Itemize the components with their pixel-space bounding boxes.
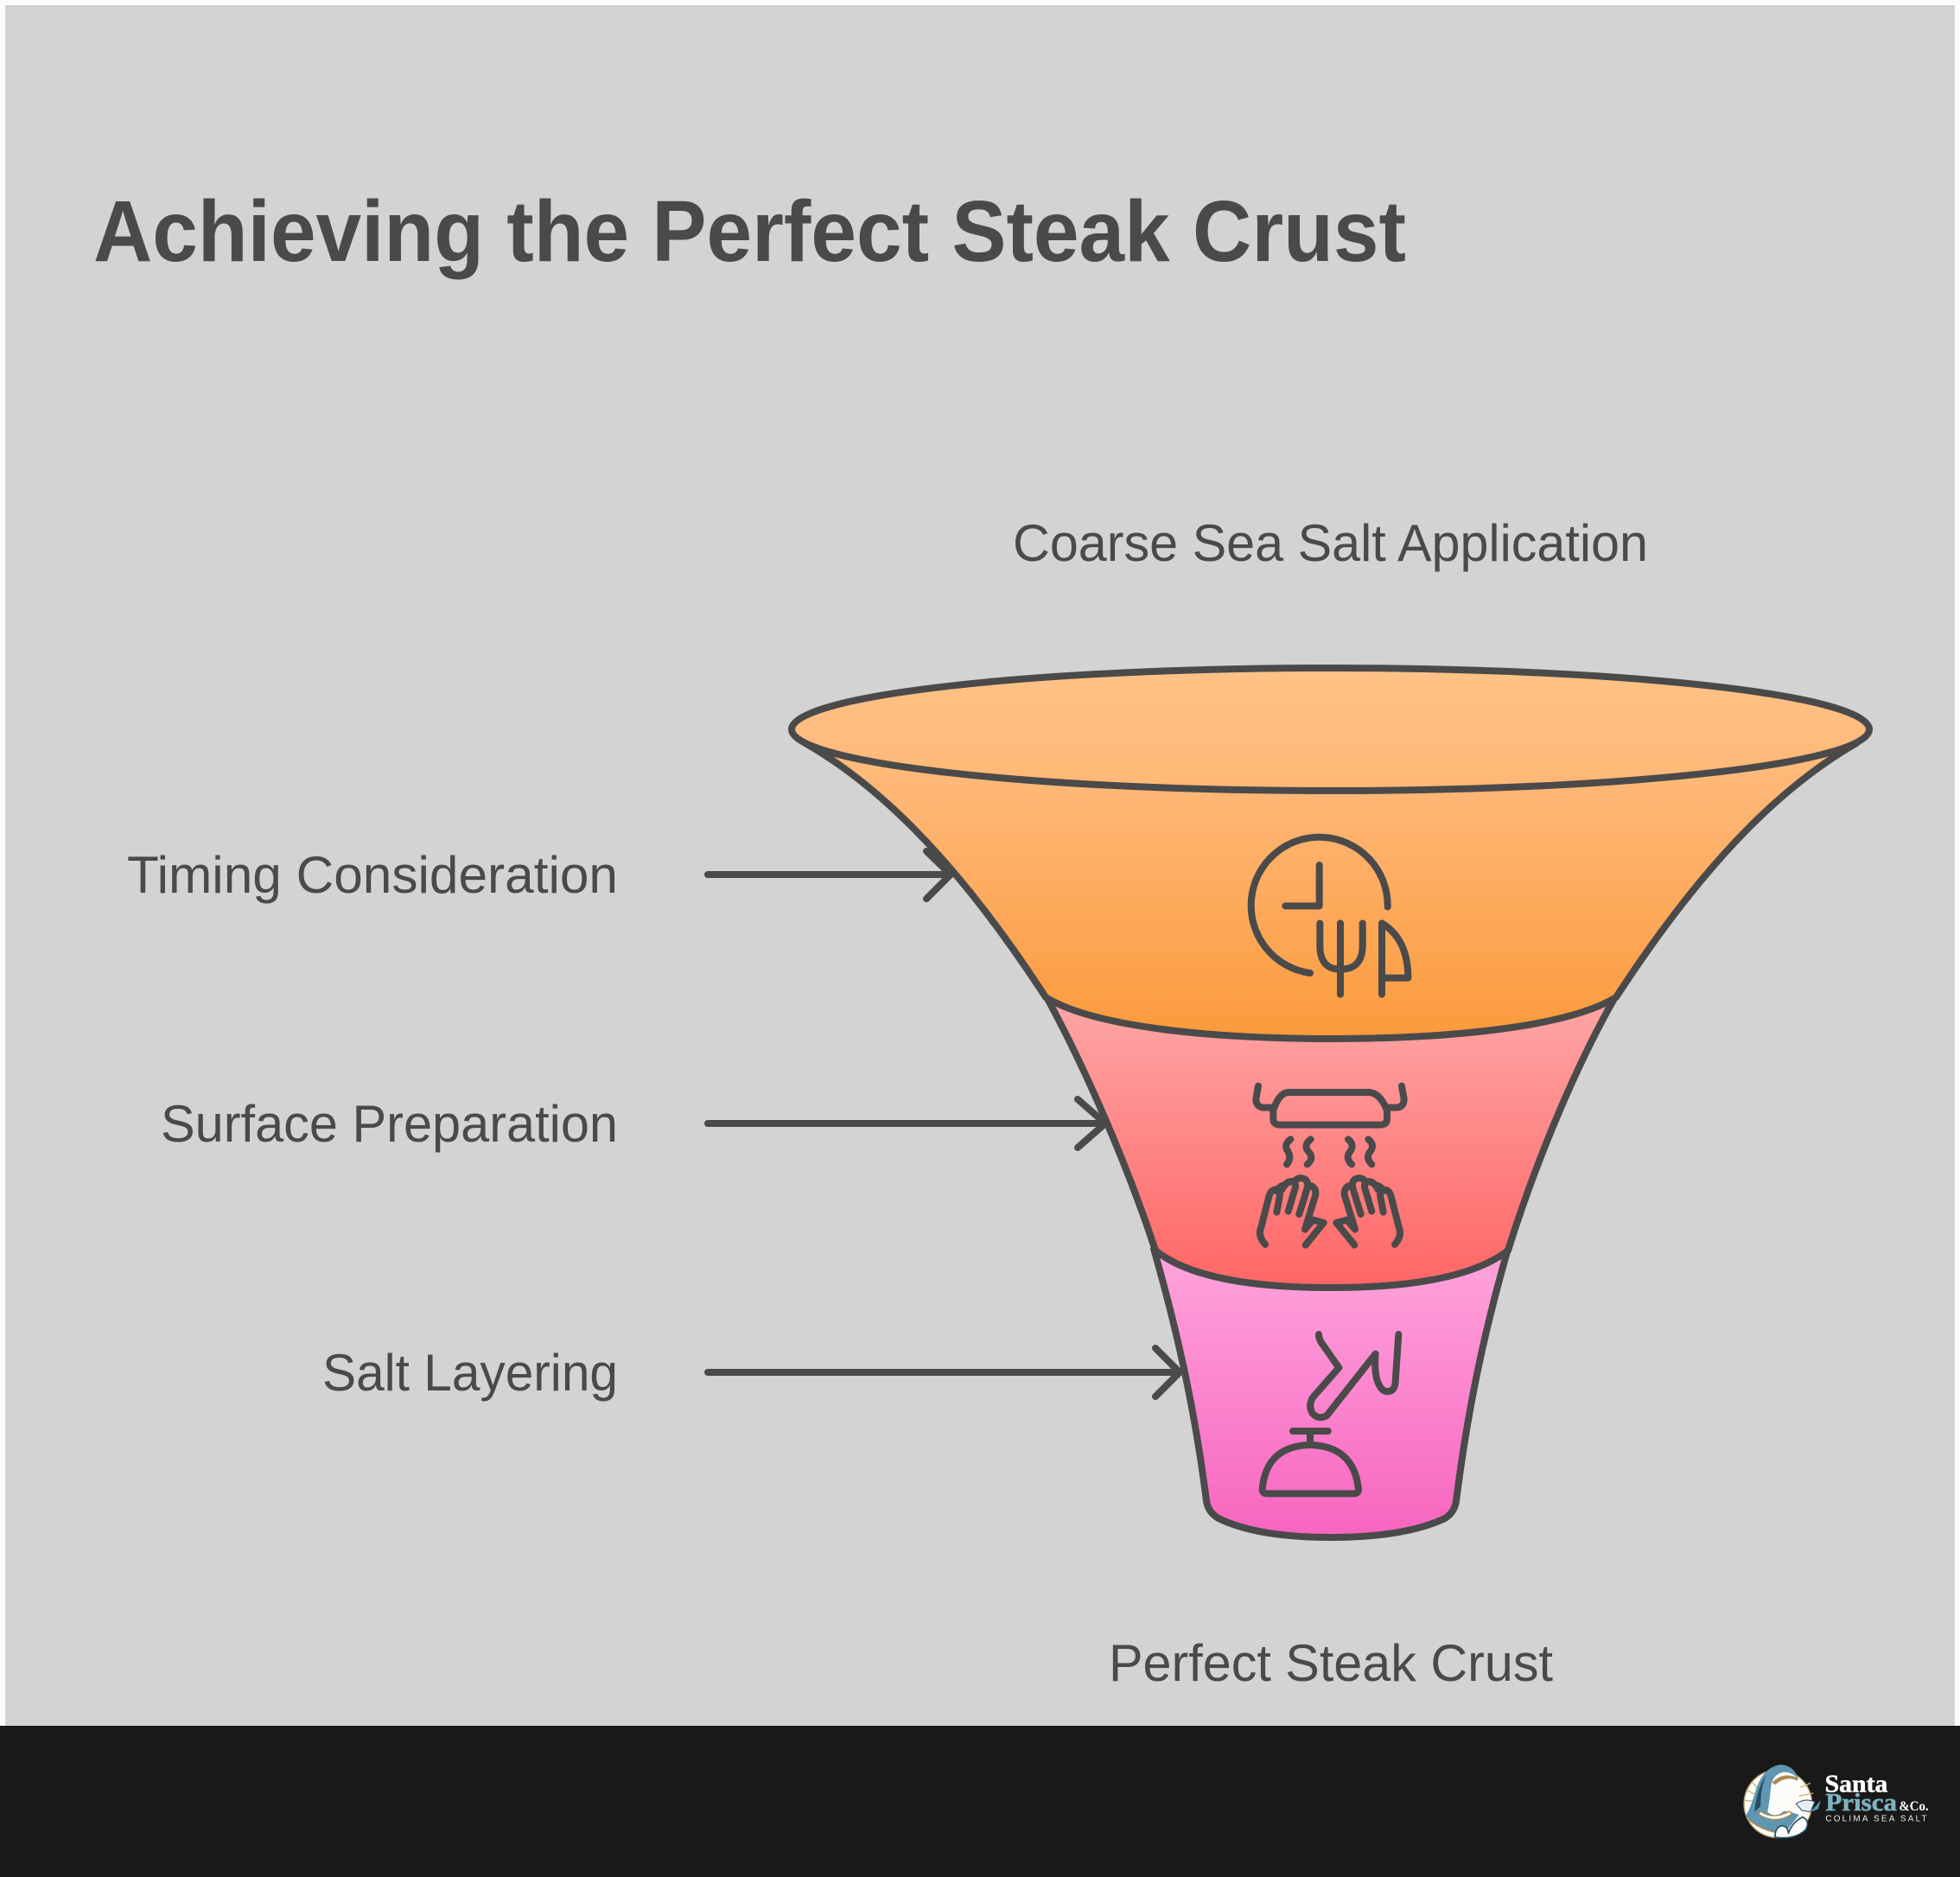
- arrow and label: Timing Consideration: Timing Consideration: [127, 846, 618, 904]
- logo wordmark: [1825, 1771, 1929, 1824]
- funnel: [792, 668, 1869, 1537]
- funnel segment: timing consideration: [805, 743, 1856, 1039]
- logo wordmark: COLIMA SEA SALT: [1825, 1815, 1927, 1824]
- funnel top ellipse: [792, 668, 1869, 791]
- logo wordmark: Santa: [1825, 1771, 1887, 1797]
- logo wordmark: &Co.: [1899, 1799, 1929, 1814]
- arrow and label: Timing Consideration: [127, 846, 951, 904]
- icon: clock with fork and knife: [1251, 837, 1408, 995]
- title: Achieving the Perfect Steak Crust: [93, 183, 1406, 280]
- logo wordmark: Prisca: [1825, 1790, 1897, 1817]
- label: Perfect Steak Crust: Perfect Steak Crust: [1109, 1634, 1553, 1692]
- icon: pan with heat and hands: [1256, 1086, 1404, 1245]
- arrow and label: Salt Layering: [322, 1344, 1180, 1402]
- arrow and label: Surface Preparation: Surface Preparation: [161, 1095, 618, 1153]
- arrow and label: Surface Preparation: [161, 1095, 1105, 1153]
- funnel segment: surface preparation: [1046, 996, 1616, 1288]
- logo: Santa Prisca & Co.: [1744, 1765, 1929, 1838]
- funnel segment: salt layering: [1154, 1249, 1508, 1537]
- arrow and label: Salt Layering: Salt Layering: [322, 1344, 618, 1402]
- logo emblem: [1744, 1765, 1821, 1838]
- label: Coarse Sea Salt Application: Coarse Sea Salt Application: [1013, 514, 1648, 572]
- icon: salt shaker over serving cloche: [1263, 1334, 1398, 1493]
- footer bar: [0, 1726, 1960, 1877]
